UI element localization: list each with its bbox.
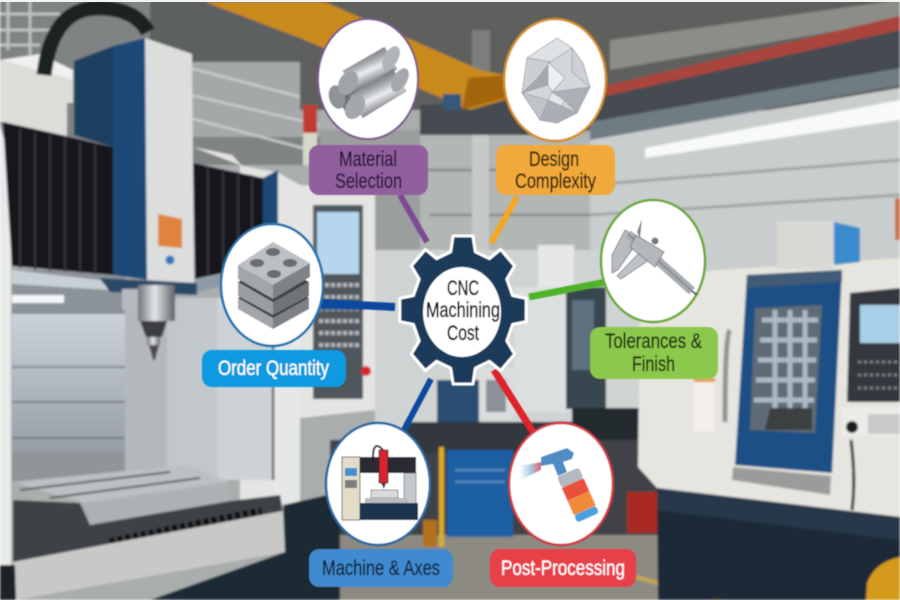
top edge strip — [0, 0, 900, 2]
bellows right — [193, 163, 263, 279]
orange crane beam — [205, 2, 505, 110]
left white post — [0, 125, 11, 565]
dark band under the red beam — [420, 30, 900, 150]
label text: Finish — [632, 353, 675, 376]
connector: tolerances and finish — [529, 282, 606, 297]
icon: stacked plates — [238, 242, 310, 329]
red beam — [605, 16, 900, 96]
connector: design complexity — [491, 197, 517, 243]
label text: Machine & Axes — [322, 557, 440, 580]
ceiling — [300, 0, 900, 110]
circle — [601, 200, 705, 322]
label box — [496, 145, 615, 195]
connector: post-processing — [494, 370, 533, 432]
light tube — [645, 100, 900, 158]
circle — [504, 19, 606, 141]
connector: order quantity — [320, 303, 395, 307]
label box — [590, 327, 718, 379]
central gear: CNC Machining Cost — [400, 236, 526, 384]
gear label: CNC — [447, 277, 479, 300]
floor — [330, 440, 660, 600]
panel: design complexity — [496, 19, 615, 195]
right machine — [638, 258, 900, 517]
circle — [221, 224, 323, 346]
center wall — [420, 135, 590, 260]
connector: machine and axes — [404, 379, 431, 430]
upper left block — [0, 60, 73, 136]
panel: machine and axes — [309, 423, 453, 587]
label box — [490, 549, 636, 587]
label text: Material — [339, 148, 397, 171]
icon: CNC machine — [342, 446, 418, 520]
panel: order quantity — [202, 224, 346, 387]
cable chain — [44, 8, 148, 75]
label box — [309, 145, 428, 195]
label box — [202, 350, 346, 387]
icon: metal rods — [326, 43, 413, 123]
upper left wall — [0, 0, 320, 165]
label text: Tolerances & — [605, 330, 702, 353]
gear label: Cost — [447, 322, 479, 345]
spindle — [122, 289, 138, 310]
floor line — [636, 577, 720, 600]
icon: spray bottle — [520, 448, 599, 523]
head column — [74, 46, 113, 147]
label text: Order Quantity — [218, 357, 329, 380]
machine interior — [12, 270, 125, 316]
circle — [509, 423, 613, 545]
mid machinery — [375, 250, 640, 460]
connector: material selection — [400, 195, 427, 242]
gear label: Machining — [426, 299, 500, 322]
bellows left — [3, 122, 113, 275]
panel: post-processing — [490, 423, 636, 587]
left machine housing — [193, 147, 375, 510]
icon: polyhedron — [522, 38, 590, 123]
machine base — [13, 511, 285, 600]
overlay diagram — [202, 19, 718, 587]
grey beam — [590, 68, 900, 140]
circle — [326, 423, 430, 545]
label box — [309, 549, 453, 587]
red box — [627, 492, 658, 533]
panel: tolerances and finish — [590, 200, 718, 379]
gear shape — [400, 236, 526, 384]
label text: Design — [529, 148, 579, 171]
label text: Post-Processing — [501, 557, 625, 580]
blue cabinet — [447, 450, 513, 537]
circle — [318, 19, 418, 139]
gear centre disc — [423, 267, 501, 357]
wall right — [590, 88, 900, 270]
label text: Complexity — [515, 170, 596, 193]
panel: material selection — [309, 19, 428, 195]
icon: caliper — [612, 219, 697, 295]
label text: Selection — [335, 170, 402, 193]
machine table — [13, 495, 283, 562]
